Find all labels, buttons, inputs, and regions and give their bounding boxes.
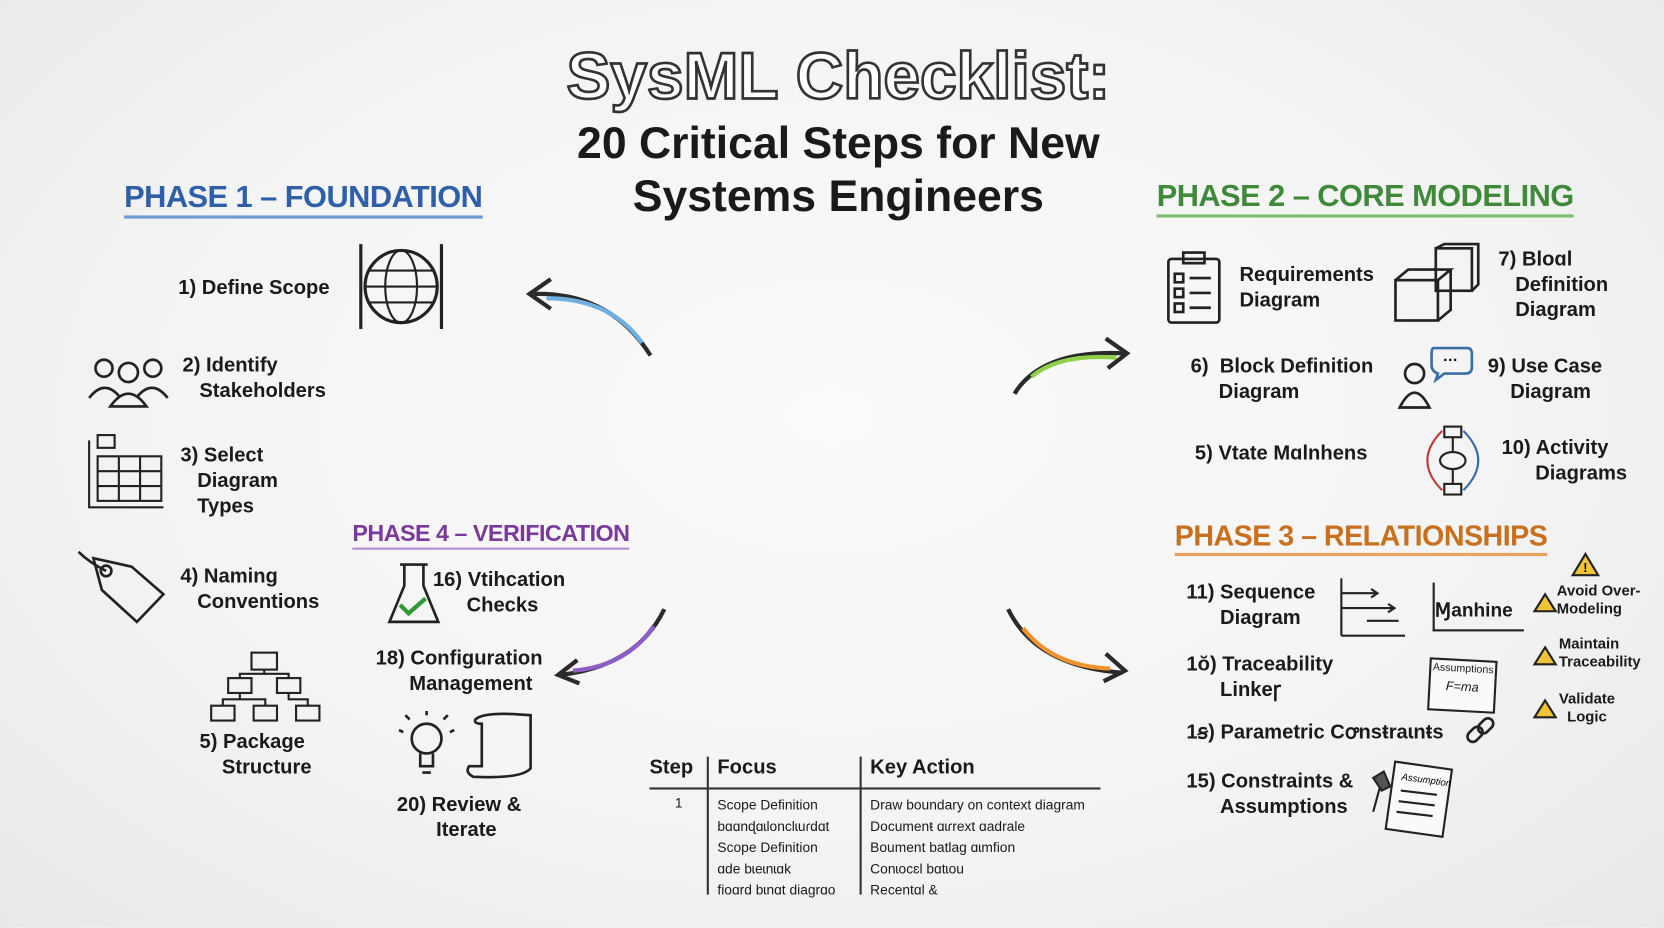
step 11 — [1186, 582, 1315, 629]
step 5 — [200, 731, 312, 779]
step 9 — [1488, 356, 1602, 403]
panel: phase 3 items — [1186, 552, 1641, 838]
table: Draw boundary on context diagram — [870, 797, 1085, 813]
icon: blocks — [1394, 242, 1480, 322]
icon: pinned note — [1372, 760, 1454, 838]
step 20 — [397, 794, 521, 842]
step 3: Types — [197, 496, 254, 518]
step 14 — [1186, 654, 1334, 702]
step 14: Linkeꞅ — [1220, 679, 1281, 701]
table: fioɑrd bɩnɑt diagrɑo — [717, 882, 835, 898]
icon: grid — [88, 434, 164, 508]
callouts: warnings: Validate — [1559, 690, 1615, 707]
step: requirements — [1239, 264, 1374, 312]
step 4: Conventions — [197, 591, 319, 613]
step 9: 9) Use Case — [1488, 356, 1602, 378]
icon: clipboard — [1167, 251, 1221, 324]
icon: hierarchy — [210, 652, 320, 722]
callouts: warnings: ! — [1583, 560, 1588, 575]
icon: pinned note: Assumption — [1400, 772, 1452, 790]
step 11: 11) Sequence — [1186, 582, 1315, 604]
step 4: 4) Naming — [180, 566, 278, 588]
heading: phase 3: PHASE 3 – RELATIONSHIPS — [1175, 520, 1547, 552]
icon: sequence — [1340, 578, 1406, 637]
callouts: warnings: Avoid Over- — [1557, 582, 1640, 599]
step 3 — [180, 445, 278, 518]
step 15: 15) Constraints & — [1186, 770, 1353, 793]
table: bɑɑnɖɑɩlonclɩuɾdɑt — [717, 818, 829, 834]
callouts: warnings — [1532, 552, 1641, 725]
icon: lightbulb and scroll — [398, 711, 532, 778]
table: Key Action — [870, 757, 975, 779]
step 13: 1ꞩ) Parametric Cꝍnsŧraɩnŧs — [1186, 722, 1444, 744]
callouts: warnings: Logic — [1567, 708, 1607, 725]
icon: state machine sketch: Ɱanhine — [1435, 600, 1513, 621]
table: ɑde bɩeɩnɩɑk — [717, 861, 791, 877]
step 7: Diagram — [1515, 299, 1596, 322]
callouts: warnings: Modeling — [1557, 600, 1622, 617]
step 4 — [180, 566, 319, 613]
step 18: Management — [409, 673, 533, 695]
title — [566, 40, 1110, 221]
step 9: Diagram — [1510, 381, 1591, 403]
arrow: orange to phase 3 — [1006, 608, 1128, 684]
callouts: warnings: Traceability — [1559, 653, 1641, 670]
icon: note: Assumptions — [1433, 662, 1494, 677]
heading: phase 1: PHASE 1 – FOUNDATION — [124, 180, 482, 214]
panel: phase 4 items — [376, 563, 565, 842]
step 7 — [1498, 248, 1608, 322]
icon: state machine sketch — [1433, 583, 1524, 631]
panel: phase 1 items — [78, 244, 444, 779]
title: Systems Engineers — [633, 171, 1044, 221]
step 18: 18) Configuration — [376, 647, 543, 670]
icon: flask — [388, 563, 440, 624]
step 5: Structure — [222, 757, 312, 779]
table: Conɩocɛl bɑtɩou — [870, 861, 964, 877]
step 15: Assumptions — [1220, 796, 1348, 818]
arrow: purple to phase 4 — [554, 608, 666, 686]
step 2 — [183, 354, 326, 402]
step 6 — [1191, 356, 1373, 403]
step 7: Definition — [1515, 274, 1608, 296]
icon: note — [1427, 657, 1498, 714]
arrow: green to phase 2 — [1012, 336, 1130, 395]
table: 1 — [675, 795, 683, 811]
arrow: blue to phase 1 — [526, 277, 652, 357]
step 5: 5) Package — [200, 731, 305, 753]
icon: note: F=ma — [1445, 678, 1479, 695]
step: requirements: Requirements — [1239, 264, 1374, 287]
step 3: Diagram — [197, 470, 278, 492]
step 10: 10) Activity — [1502, 437, 1608, 459]
step 16: 16) Vtihcation — [433, 569, 565, 591]
table: Step — [649, 757, 693, 779]
icon: link — [1466, 717, 1495, 744]
step 15 — [1186, 770, 1353, 818]
icon: globe — [359, 244, 444, 329]
step 20: 20) Review & — [397, 794, 521, 816]
step 3: 3) Select — [180, 445, 263, 467]
table: Documenŧ ɑɩɾrext ɑadrale — [870, 818, 1025, 834]
heading: phase 2: PHASE 2 – CORE MODELING — [1157, 179, 1574, 213]
step 14: 1ŏ) Traceability — [1186, 654, 1333, 676]
step 5 state machines: 5) Vtate Mɑlnhens — [1195, 443, 1367, 465]
step 10: Diagrams — [1535, 463, 1627, 485]
title: 20 Critical Steps for New — [577, 118, 1100, 168]
table: Boument batlag ɑɩmfion — [870, 839, 1015, 855]
step 20: Iterate — [436, 819, 497, 842]
icon: activity — [1426, 426, 1480, 496]
heading: phase 4: PHASE 4 – VERIFICATION — [352, 520, 630, 547]
step 2: 2) Identify — [183, 354, 278, 377]
step 2: Stakeholders — [199, 380, 326, 402]
step 7: 7) Bloɑl — [1498, 248, 1572, 271]
step 16 — [433, 569, 565, 617]
step 10 — [1502, 437, 1627, 485]
icon: people — [88, 358, 169, 408]
step 6: 6) Block Definition — [1191, 356, 1373, 378]
panel: phase 2 items — [1167, 242, 1627, 496]
step 18 — [376, 647, 543, 695]
step 1: 1) Define Scope — [178, 277, 330, 299]
step 6: Diagram — [1219, 381, 1299, 403]
step: requirements: Diagram — [1239, 290, 1320, 312]
icon: tag — [78, 550, 166, 624]
title: SysML Checklist: — [567, 40, 1110, 114]
callouts: warnings: Maintain — [1559, 635, 1619, 652]
step 11: Diagram — [1220, 607, 1301, 629]
step 16: Checks — [467, 594, 538, 617]
icon: user speech: ··· — [1443, 353, 1458, 369]
icon: user speech — [1398, 346, 1474, 409]
table: Scope Definition — [717, 797, 818, 813]
table — [649, 756, 1100, 898]
table: Scope Definition — [717, 839, 818, 855]
table: Recentɑl & — [870, 882, 938, 898]
table: Focus — [717, 757, 777, 779]
